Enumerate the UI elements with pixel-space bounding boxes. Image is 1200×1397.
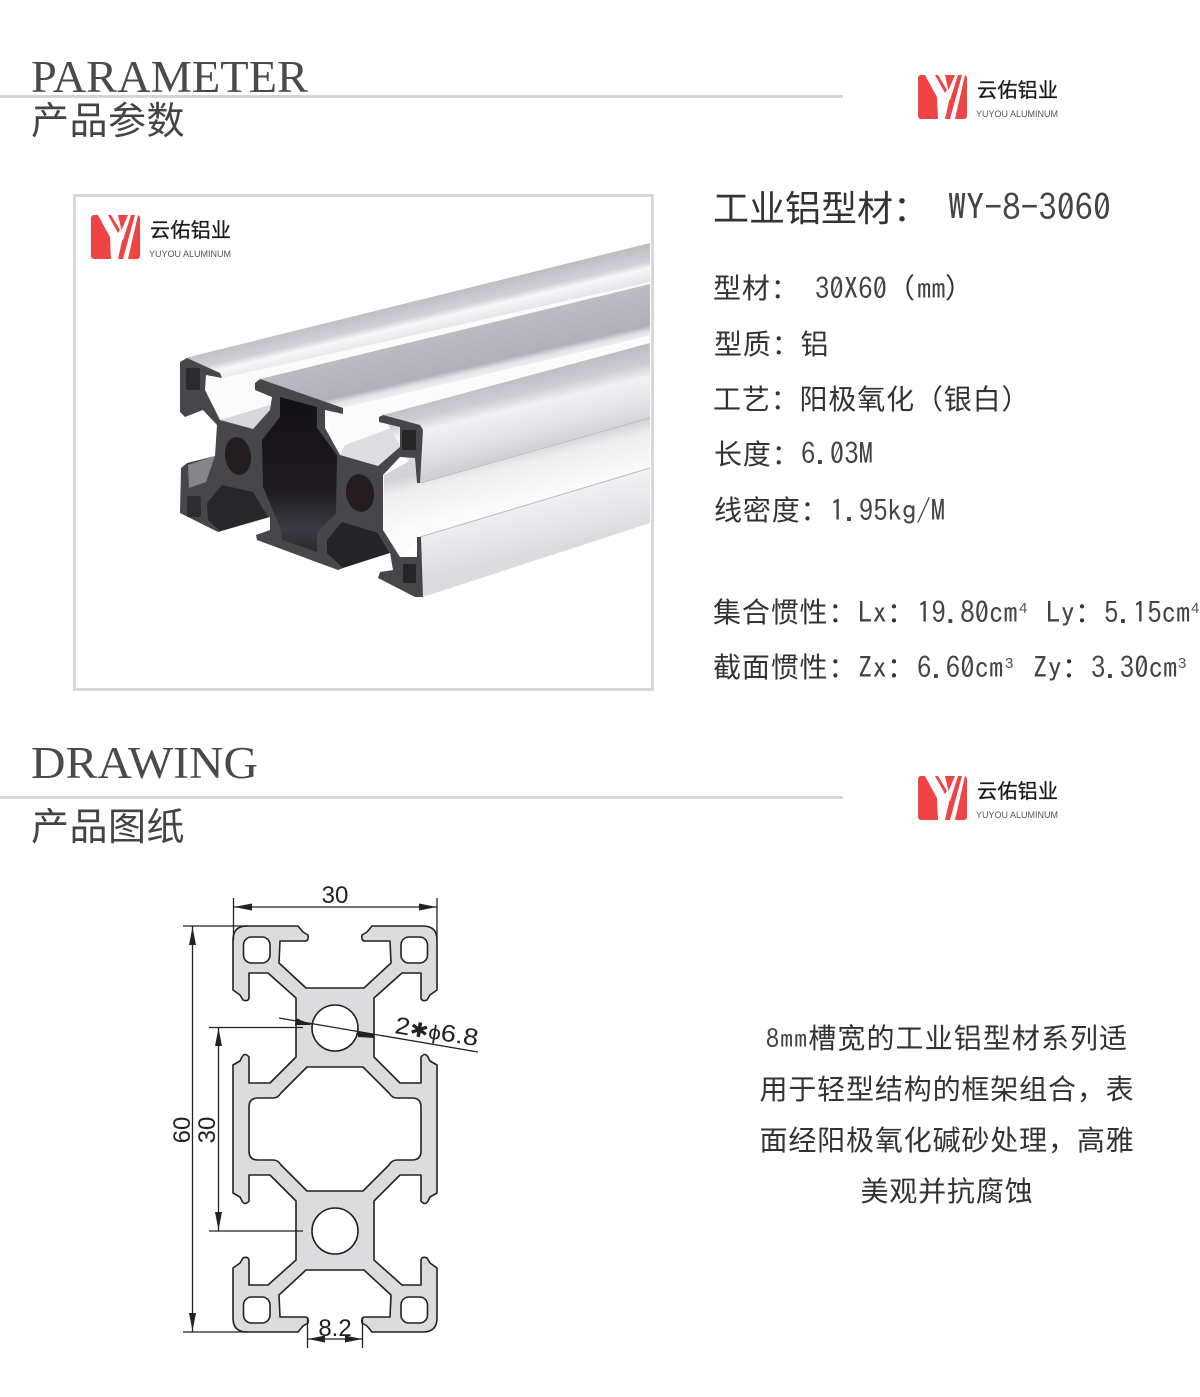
product title xyxy=(713,180,1111,232)
dimension: height 60: 60 xyxy=(169,1117,196,1143)
spec: section modulus xyxy=(713,646,1186,686)
logo: in photo frame xyxy=(91,214,231,259)
spec: profile size: mm xyxy=(917,275,946,303)
logo: in photo frame: YUYOU ALUMINUM xyxy=(149,249,231,259)
spec: moment of inertia: 集合惯性： xyxy=(713,591,857,631)
logo: top right xyxy=(918,74,1058,119)
heading: PARAMETER: 产品参数 xyxy=(31,90,185,145)
spec: moment of inertia: 4 xyxy=(1191,600,1199,617)
spec: section modulus: Zy xyxy=(1033,654,1062,682)
description text: 面经阳极氧化碱砂处理，高雅 xyxy=(759,1119,1135,1159)
spec: section modulus: 3.30cm xyxy=(1091,654,1177,682)
description text xyxy=(759,1017,1135,1210)
spec: length xyxy=(714,433,873,473)
heading: DRAWING: DRAWING xyxy=(31,738,258,788)
description text: 美观并抗腐蚀 xyxy=(860,1170,1034,1210)
aluminum profile photo illustration xyxy=(180,243,650,598)
dimension: hole diameter: 2✱ϕ6.8 xyxy=(393,1012,480,1052)
description text: 8mm槽宽的工业铝型材系列适 xyxy=(766,1017,1128,1057)
spec: profile size: 30X60 xyxy=(815,275,887,303)
spec: profile size: ） xyxy=(945,267,974,307)
profile section outline xyxy=(233,926,437,1332)
spec: moment of inertia: 4 xyxy=(1019,600,1027,617)
dimension: hole diameter xyxy=(279,1012,480,1052)
heading: PARAMETER: PARAMETER xyxy=(31,52,308,102)
description text: 用于轻型结构的框架组合，表 xyxy=(759,1068,1135,1108)
technical drawing: cross section xyxy=(169,882,480,1348)
spec: section modulus: 3 xyxy=(1178,655,1186,672)
spec: linear density: 1.95kg/M xyxy=(830,496,945,525)
logo: in photo frame: 云佑铝业 xyxy=(150,214,231,243)
spec: moment of inertia: ： xyxy=(1075,591,1104,631)
heading: DRAWING: 产品图纸 xyxy=(31,796,185,851)
product title: WY-8-3060 xyxy=(948,189,1111,225)
spec: length: 6.03M xyxy=(801,440,873,468)
logo: drawing section: 云佑铝业 xyxy=(977,775,1058,804)
logo: top right: YUYOU ALUMINUM xyxy=(976,109,1058,119)
heading: DRAWING xyxy=(0,738,843,851)
spec: profile size: 型材： xyxy=(713,267,800,307)
spec: linear density xyxy=(714,489,945,529)
spec: length: 长度： xyxy=(714,433,801,473)
spec: section modulus: ： xyxy=(887,646,916,686)
logo: drawing section xyxy=(918,775,1058,820)
heading: PARAMETER xyxy=(0,52,843,145)
dimension: slot width 8.2: 8.2 xyxy=(318,1315,352,1342)
spec: process: 工艺：阳极氧化（银白） xyxy=(713,378,1030,418)
spec: profile size: （ xyxy=(887,267,916,307)
logo: top right: 云佑铝业 xyxy=(977,74,1058,103)
spec: section modulus: 6.60cm xyxy=(917,654,1003,682)
panel: product photo xyxy=(74,196,652,690)
spec: section modulus: 3 xyxy=(1005,655,1013,672)
dimension: centre distance 30: 30 xyxy=(194,1117,221,1143)
dimension: slot width 8.2 xyxy=(308,1315,362,1348)
spec: moment of inertia: 19.80cm xyxy=(917,599,1018,627)
spec: moment of inertia: Lx xyxy=(858,599,887,627)
dimension: width 30 xyxy=(234,882,437,940)
inner chamber xyxy=(262,397,337,552)
spec: section modulus: Zx xyxy=(858,654,887,682)
spec: moment of inertia xyxy=(713,591,1199,631)
spec: profile size xyxy=(713,267,974,307)
dimension: height 60 xyxy=(169,926,248,1332)
spec: material: 型质：铝 xyxy=(714,323,829,363)
spec: linear density: 线密度： xyxy=(714,489,829,529)
spec: moment of inertia: ： xyxy=(887,591,916,631)
product title: 工业铝型材： xyxy=(713,180,929,232)
profile end face xyxy=(180,358,423,597)
logo: drawing section: YUYOU ALUMINUM xyxy=(976,810,1058,820)
dimension: centre distance 30 xyxy=(194,1028,303,1231)
spec: moment of inertia: 5.15cm xyxy=(1104,599,1190,627)
spec: moment of inertia: Ly xyxy=(1046,599,1075,627)
spec: section modulus: 截面惯性： xyxy=(713,646,857,686)
dimension: width 30: 30 xyxy=(322,882,348,909)
spec: section modulus: ： xyxy=(1062,646,1091,686)
